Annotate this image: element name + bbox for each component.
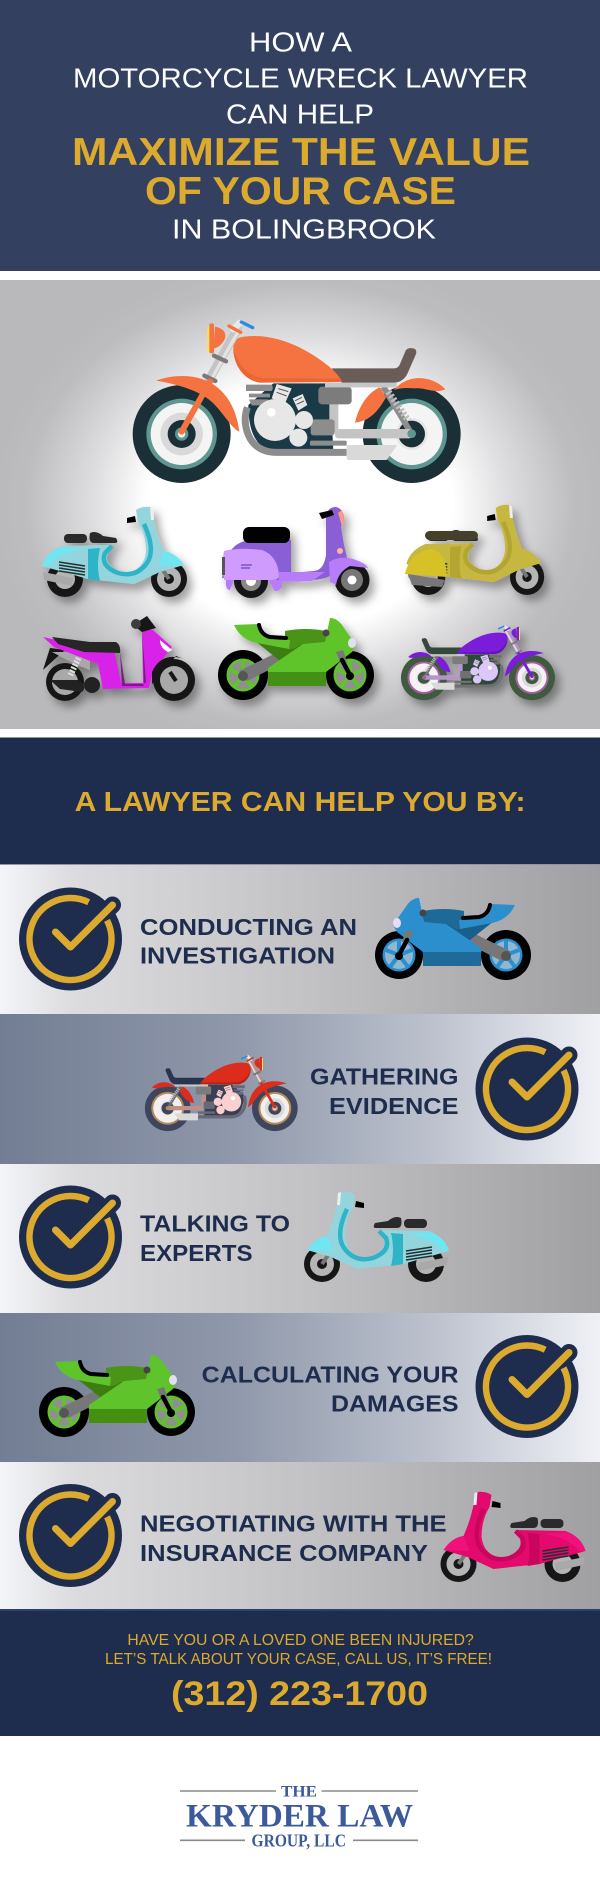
text: talking to experts: EXPERTS (140, 1240, 253, 1266)
text: conducting an investigation: INVESTIGATION (140, 943, 335, 969)
title: highlighted lines: MAXIMIZE THE VALUE (72, 131, 530, 174)
row 5: negotiating with the insurance company (0, 1462, 600, 1609)
illustration: blue sport bike (375, 898, 531, 980)
row 3: talking to experts (0, 1164, 600, 1313)
title: highlighted lines: OF YOUR CASE (145, 170, 456, 213)
text: gathering evidence: GATHERING (310, 1063, 458, 1089)
icon: check mark (472, 1331, 582, 1442)
logo: the kryder law group (180, 1784, 418, 1851)
row 1: conducting an investigation (0, 865, 600, 1014)
row 2: gathering evidence (0, 1014, 600, 1164)
text: conducting an investigation (140, 914, 357, 969)
heading band: a lawyer can help you by (0, 738, 600, 864)
text: calculating your damages: CALCULATING YOUR (202, 1362, 459, 1388)
illustration: teal scooter facing left (304, 1192, 449, 1282)
title: lead-in lines: HOW A (249, 27, 352, 58)
text: gathering evidence (310, 1063, 458, 1119)
icon: check mark (15, 1480, 126, 1591)
illustration: magenta scooter (43, 616, 195, 701)
text: gathering evidence: EVIDENCE (329, 1093, 458, 1119)
illustration: red cruiser motorcycle (145, 1056, 298, 1131)
illustration: green sport bike (218, 618, 374, 700)
illustration: pink scooter (440, 1492, 586, 1582)
cta text: LET’S TALK ABOUT YOUR CASE, CALL US, IT’S FREE! (105, 1651, 492, 1668)
phone number: (312) 223-1700 (171, 1675, 428, 1713)
illustration: large orange cruiser motorcycle (133, 322, 461, 483)
icon: check mark (15, 884, 126, 994)
illustration: green sport bike (39, 1355, 195, 1437)
logo: the kryder law group: THE (281, 1784, 317, 1801)
text: talking to experts (140, 1211, 290, 1266)
text: calculating your damages: DAMAGES (331, 1391, 458, 1417)
icon: check mark (15, 1182, 126, 1292)
row 4: calculating your damages (0, 1313, 600, 1462)
illustration: purple cruiser motorcycle (401, 626, 555, 700)
title: lead-in lines: MOTORCYCLE WRECK LAWYER (73, 63, 528, 94)
logo: the kryder law group: KRYDER LAW (186, 1799, 413, 1835)
header banner (0, 0, 600, 271)
text: talking to experts: TALKING TO (140, 1211, 290, 1237)
title: highlighted lines (72, 131, 530, 213)
title: lead-in lines (73, 27, 528, 130)
panel: motorcycle showcase (0, 280, 600, 729)
illustration: yellow scooter (405, 505, 544, 595)
text: negotiating with the insurance company (140, 1511, 447, 1566)
cta text: HAVE YOU OR A LOVED ONE BEEN INJURED? (127, 1632, 474, 1649)
title: location line: IN BOLINGBROOK (172, 214, 436, 245)
logo: the kryder law group: GROUP, LLC (252, 1831, 346, 1851)
cta text (105, 1632, 492, 1668)
icon: check mark (472, 1034, 582, 1144)
illustration: teal scooter (42, 507, 187, 597)
text: calculating your damages (202, 1362, 459, 1417)
text: negotiating with the insurance company: INSURANCE COMPANY (140, 1540, 428, 1566)
text: negotiating with the insurance company: NEGOTIATING WITH THE (140, 1511, 447, 1537)
title: lead-in lines: CAN HELP (226, 99, 374, 130)
heading text: A LAWYER CAN HELP YOU BY: (75, 786, 526, 817)
text: conducting an investigation: CONDUCTING AN (140, 914, 357, 940)
illustration: purple scooter (222, 507, 370, 598)
footer call to action (0, 1609, 600, 1736)
